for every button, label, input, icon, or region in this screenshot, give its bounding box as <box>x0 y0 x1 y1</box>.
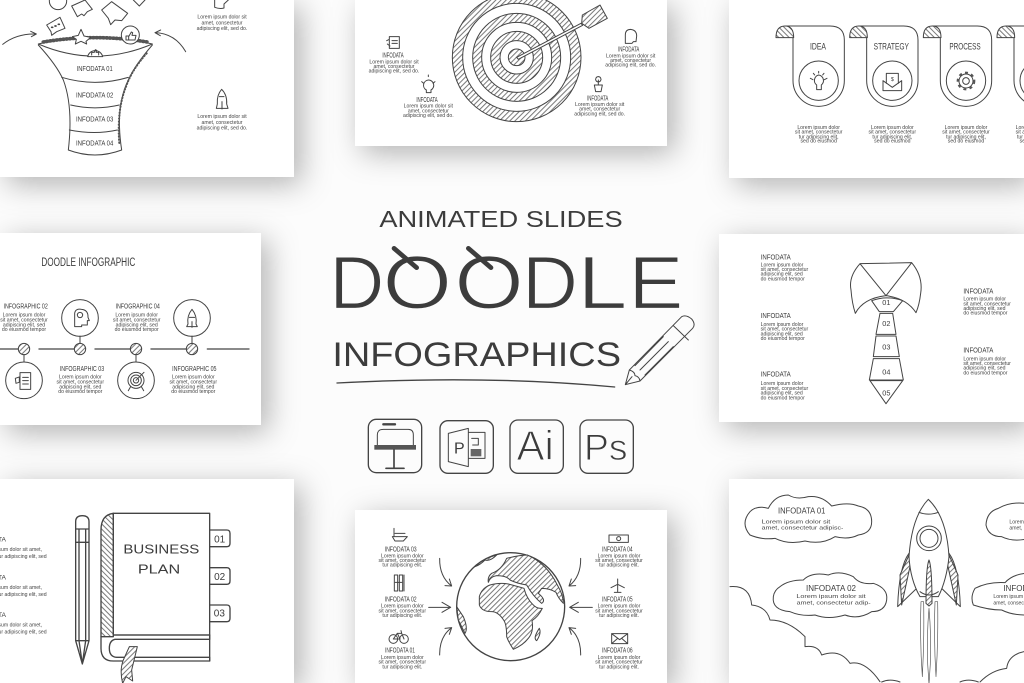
text: infographic 03: adipiscing elit, sed <box>59 384 102 390</box>
text: left one: Lorem ipsum dolor <box>761 262 804 268</box>
notebook: BUSINESS <box>123 541 199 556</box>
node: target icon <box>118 362 154 399</box>
text: infographic 04: adipiscing elit, sed <box>116 322 158 328</box>
text: infodata 05 <box>595 596 643 619</box>
text: infographic 04 <box>113 303 161 333</box>
arrow in target <box>517 5 607 59</box>
tabs: 03 <box>214 609 225 620</box>
title: doodle <box>329 240 683 324</box>
arrows into globe <box>429 558 592 655</box>
text: right one: Lorem ipsum dolor <box>963 297 1006 303</box>
text: infodata 01: tur adipiscing elit. <box>382 664 422 670</box>
icon: envelope <box>612 634 628 644</box>
text: infodata 03: INFODATA 03 <box>385 546 417 553</box>
text block: infodata right top: amet, consectetur <box>610 58 651 64</box>
text block: infodata left top <box>369 52 419 75</box>
text: infodata 06: Lorem ipsum dolor <box>598 655 641 661</box>
text block: idea: tur adipiscing elit, <box>799 134 839 140</box>
subtitle: animated slides: ANIMATED SLIDES <box>379 206 623 232</box>
icon: bicycle <box>389 631 408 643</box>
text block: infodata right top: Lorem ipsum dolor sit <box>606 53 656 59</box>
icon: light bulb <box>422 75 435 93</box>
cloud: right top: Lorem <box>1009 519 1024 525</box>
text block: fourth cropped <box>1016 125 1024 145</box>
text block: infodata left top: amet, consectetur <box>374 64 415 70</box>
panel: doodle timeline slide <box>0 233 261 425</box>
text: cropped list <box>0 536 47 636</box>
cloud: infodata 02 <box>773 573 887 617</box>
panel: funnel slide <box>0 0 294 177</box>
text: infodata 06: INFODATA 06 <box>602 648 633 655</box>
text block: infodata right bottom: adipiscing elit, sed do. <box>574 111 625 117</box>
panel: globe slide <box>355 510 667 683</box>
land: madagascar <box>535 628 540 641</box>
text: infodata 03: sit amet, consectetur <box>379 558 426 564</box>
text block: infodata left bottom: amet, consectetur <box>408 108 449 114</box>
text: infographic 02: do eiusmod tempor <box>2 327 46 333</box>
text block: infodata left top: adipiscing elit, sed do. <box>369 69 419 75</box>
necktie chart: 01 <box>882 298 890 307</box>
notebook <box>101 513 210 661</box>
cloud: right bottom: Lorem ipsum <box>993 594 1023 600</box>
text: left three: Lorem ipsum dolor <box>761 381 804 387</box>
cloud: infodata 02: Lorem ipsum dolor sit <box>796 594 866 600</box>
text block: adipiscing elit, sed do. <box>197 126 247 132</box>
text block: infodata right bottom <box>574 95 625 117</box>
text block: infodata right top: INFODATA <box>618 47 640 54</box>
text: infographic 03 <box>57 366 104 395</box>
text: infographic 02: INFOGRAPHIC 02 <box>3 303 48 310</box>
icon: banknote <box>609 535 628 542</box>
text block: strategy <box>869 125 916 145</box>
necktie chart: 04 <box>882 368 890 377</box>
icon: money envelope: $ <box>891 77 894 83</box>
ribbon bookmark <box>121 647 137 683</box>
text: infographic 05: Lorem ipsum dolor <box>172 375 215 381</box>
text: left two: sit amet, consectetur <box>761 327 809 333</box>
cloud: infodata 01: INFODATA 01 <box>778 507 826 516</box>
card: strategy: STRATEGY <box>874 41 910 51</box>
necktie chart: 05 <box>882 389 890 398</box>
icon: head <box>215 0 228 9</box>
text block: process: Lorem ipsum dolor <box>945 125 988 131</box>
text: infodata 02: sit amet, consectetur <box>379 608 426 614</box>
funnel chart: INFODATA 02 <box>76 93 113 100</box>
funnel chart: INFODATA 03 <box>76 117 113 124</box>
icon: plant <box>594 77 602 92</box>
icon: keynote <box>368 419 422 473</box>
icon: ship <box>392 528 407 541</box>
text block: strategy: Lorem ipsum dolor <box>871 125 914 131</box>
icon: cutlery <box>394 575 404 591</box>
text block: infodata left bottom: INFODATA <box>416 97 438 104</box>
node: head icon <box>62 300 98 336</box>
text: infographic 03: Lorem ipsum dolor <box>59 375 102 381</box>
panel: idea strategy process slide <box>729 0 1024 178</box>
text block: idea: sed do eiusmod <box>800 139 837 145</box>
icon: powerpoint <box>440 421 493 473</box>
card: fourth cropped <box>997 26 1024 102</box>
title: doodle: L <box>577 240 627 324</box>
text: infodata 04: sit amet, consectetur <box>595 558 643 564</box>
tabs: 01 <box>214 534 226 545</box>
text: infodata 02 <box>379 596 426 619</box>
text: infodata 03: tur adipiscing elit. <box>382 563 422 569</box>
timeline <box>0 336 249 362</box>
icon: notes <box>387 37 399 48</box>
funnel chart: INFODATA 01 <box>77 66 113 73</box>
title: doodle: O <box>454 240 524 324</box>
text: infodata 02: Lorem ipsum dolor <box>381 604 424 610</box>
text: infodata 01: sit amet, consectetur <box>379 660 426 666</box>
necktie chart <box>851 263 921 404</box>
cloud: infodata 01 <box>745 495 872 542</box>
text: infodata 05: sit amet, consectetur <box>595 608 643 614</box>
cloud: infodata 02: INFODATA 02 <box>806 584 857 593</box>
text: infographic 05: INFOGRAPHIC 05 <box>172 366 217 373</box>
text block: strategy: tur adipiscing elit, <box>872 134 912 140</box>
panel: business plan slide <box>0 479 294 683</box>
text: infodata 04: INFODATA 04 <box>602 546 633 553</box>
icons: falling social symbols <box>47 0 145 57</box>
text: infodata 06: tur adipiscing elit. <box>599 664 639 670</box>
text: left two: do eiusmod tempor <box>761 336 805 342</box>
card: strategy <box>850 26 918 106</box>
text: left three: adipiscing elit, sed <box>761 391 803 397</box>
text: left three: sit amet, consectetur <box>761 386 809 392</box>
text: right one: INFODATA <box>963 287 993 296</box>
text: left three: INFODATA <box>761 370 791 379</box>
target <box>452 0 581 122</box>
text: infographic 02: adipiscing elit, sed <box>3 322 45 328</box>
slide heading: DOODLE INFOGRAPHIC <box>41 256 135 269</box>
text: right two: do eiusmod tempor <box>963 370 1008 376</box>
text block: infodata left bottom <box>403 97 454 119</box>
text block: idea: sit amet, consectetur <box>795 130 843 136</box>
node: rocket icon <box>174 300 210 336</box>
card: idea: IDEA <box>810 41 827 51</box>
text: infographic 02 <box>0 303 48 333</box>
tabs: 02 <box>214 572 226 583</box>
text: infographic 04: do eiusmod tempor <box>115 327 159 333</box>
cloud: infodata 01: Lorem ipsum dolor sit <box>762 519 831 525</box>
text block: infodata left bottom: Lorem ipsum dolor sit <box>404 104 454 110</box>
text block: process: sit amet, consectetur <box>942 130 990 136</box>
title: doodle: D <box>522 240 578 324</box>
text: right one: do eiusmod tempor <box>963 311 1008 317</box>
cloud: right bottom <box>972 573 1024 615</box>
text: left two: adipiscing elit, sed <box>761 331 803 337</box>
arrows into funnel <box>3 30 186 52</box>
text: infographic 03: INFOGRAPHIC 03 <box>60 366 104 373</box>
icon: powerpoint: P <box>454 440 465 457</box>
rocket exhaust flames <box>921 602 938 683</box>
tabs <box>210 530 230 622</box>
icon: pencil <box>76 516 89 664</box>
text: infodata 05: Lorem ipsum dolor <box>598 604 641 610</box>
land: eurasia <box>488 555 563 603</box>
text block: infodata left top: Lorem ipsum dolor sit <box>369 59 419 65</box>
icon: airplane <box>611 579 624 592</box>
panel: necktie slide <box>719 234 1024 422</box>
text block: infodata right bottom: INFODATA <box>587 95 609 102</box>
text: infographic 03: do eiusmod tempor <box>58 389 103 395</box>
text: right two: sit amet, consectetur <box>963 361 1011 367</box>
subtitle: infographics: INFOGRAPHICS <box>332 336 621 374</box>
icon: head gear <box>625 29 637 43</box>
cloud: infodata 02: amet, consectetur adip- <box>797 600 871 606</box>
text: right one: sit amet, consectetur <box>963 301 1011 307</box>
text: infodata 02: INFODATA 02 <box>385 596 417 603</box>
notebook: PLAN <box>138 562 180 577</box>
funnel chart <box>38 37 152 155</box>
text block <box>197 14 247 32</box>
text block: Lorem ipsum dolor sit <box>197 114 247 120</box>
card: process <box>923 26 992 106</box>
icon: rocket <box>216 89 228 109</box>
text: infographic 02: sit amet, consectetur <box>0 317 48 323</box>
icon: illustrator <box>510 420 563 473</box>
text: infodata 06: sit amet, consectetur <box>595 660 643 666</box>
text: right two: INFODATA <box>963 345 993 354</box>
text: left two: INFODATA <box>761 311 791 320</box>
hand drawn underline <box>337 380 615 387</box>
text: left three: do eiusmod tempor <box>761 395 805 401</box>
text: infodata 05: INFODATA 05 <box>602 596 633 603</box>
text: infodata 04: Lorem ipsum dolor <box>598 553 641 559</box>
land: south america <box>457 607 466 633</box>
title: doodle: D <box>329 240 384 324</box>
text block: infodata left top: INFODATA <box>382 52 404 59</box>
text block: infodata right top: adipiscing elit, sed do. <box>605 63 656 69</box>
cloud: right top: amet, <box>1009 526 1022 532</box>
globe <box>457 553 565 661</box>
text block: Lorem ipsum dolor sit <box>197 14 247 20</box>
text block: infodata right bottom: amet, consectetur <box>579 107 620 113</box>
text: left one: adipiscing elit, sed <box>761 272 803 278</box>
land: africa <box>479 583 542 649</box>
text block: infodata right bottom: Lorem ipsum dolor sit <box>575 102 625 108</box>
necktie chart: 02 <box>882 319 890 328</box>
text block: idea: Lorem ipsum dolor <box>797 125 840 131</box>
text: infographic 05 <box>170 366 217 395</box>
text block: strategy: sed do eiusmod <box>874 139 911 145</box>
icon: photoshop: Ps <box>584 426 628 468</box>
cloud: infodata 01: amet, consectetur adipisc- <box>762 526 844 532</box>
title: doodle: O <box>383 240 452 324</box>
node: document icon <box>6 362 42 399</box>
text: infographic 04: Lorem ipsum dolor <box>115 313 158 319</box>
text: infographic 05: sit amet, consectetur <box>170 379 217 385</box>
text: infodata 06 <box>595 648 643 670</box>
icon: gear <box>958 73 974 89</box>
panel: target slide <box>355 0 667 146</box>
text: infodata 03: Lorem ipsum dolor <box>381 553 424 559</box>
text: right two: adipiscing elit, sed <box>963 366 1006 372</box>
rising smoke outline <box>730 587 1024 682</box>
card: idea <box>776 26 844 106</box>
text block: adipiscing elit, sed do. <box>197 26 247 32</box>
text: infodata 03 <box>379 546 426 569</box>
text: left one <box>761 252 809 282</box>
icon: illustrator: Ai <box>517 422 554 469</box>
text: infodata 02: tur adipiscing elit. <box>382 613 422 619</box>
text: right one <box>963 287 1011 317</box>
cloud: right top <box>986 503 1024 540</box>
text: right two <box>963 345 1011 376</box>
text block: process <box>942 125 990 145</box>
land: greenland <box>475 555 497 567</box>
text: infographic 05: adipiscing elit, sed <box>172 384 215 390</box>
icon: pencil <box>625 316 694 385</box>
title: doodle: E <box>628 240 683 324</box>
text: infodata 01: Lorem ipsum dolor <box>381 655 424 661</box>
panel: rocket slide <box>729 479 1024 683</box>
icon: bulb <box>810 71 827 90</box>
card: process: PROCESS <box>949 41 981 51</box>
text: infographic 05: do eiusmod tempor <box>171 389 216 395</box>
text block: infodata left bottom: adipiscing elit, sed do. <box>403 113 454 119</box>
text: infographic 03: sit amet, consectetur <box>57 379 104 385</box>
text: left one: sit amet, consectetur <box>761 267 809 273</box>
text: left two: Lorem ipsum dolor <box>761 322 804 328</box>
text: infodata 01: INFODATA 01 <box>385 648 415 655</box>
text: left one: do eiusmod tempor <box>761 276 805 282</box>
text: infographic 04: sit amet, consectetur <box>113 317 161 323</box>
text: infodata 04: tur adipiscing elit. <box>599 563 639 569</box>
text: left one: INFODATA <box>761 252 791 261</box>
text block: infodata right top <box>605 47 656 69</box>
funnel chart: INFODATA 04 <box>76 141 113 148</box>
central title block <box>329 206 694 473</box>
text: infodata 05: tur adipiscing elit. <box>599 613 639 619</box>
text: infodata 01 <box>379 648 426 670</box>
text: infographic 02: Lorem ipsum dolor <box>3 313 46 319</box>
text: infodata 04 <box>595 546 643 569</box>
text: right two: Lorem ipsum dolor <box>963 356 1006 362</box>
text block: strategy: sit amet, consectetur <box>869 130 916 136</box>
text block: process: tur adipiscing elit, <box>946 134 986 140</box>
text: left three <box>761 370 809 401</box>
rocket <box>898 499 960 607</box>
icon: photoshop <box>580 420 633 473</box>
text: left two <box>761 311 809 342</box>
necktie chart: 03 <box>882 342 890 351</box>
text block: amet, consectetur <box>202 120 243 126</box>
text: right one: adipiscing elit, sed <box>963 306 1006 312</box>
text block: process: sed do eiusmod <box>948 139 984 145</box>
text block: idea <box>795 125 843 145</box>
text block: amet, consectetur <box>202 20 243 26</box>
text: infographic 04: INFOGRAPHIC 04 <box>115 303 160 310</box>
text block <box>197 114 247 132</box>
